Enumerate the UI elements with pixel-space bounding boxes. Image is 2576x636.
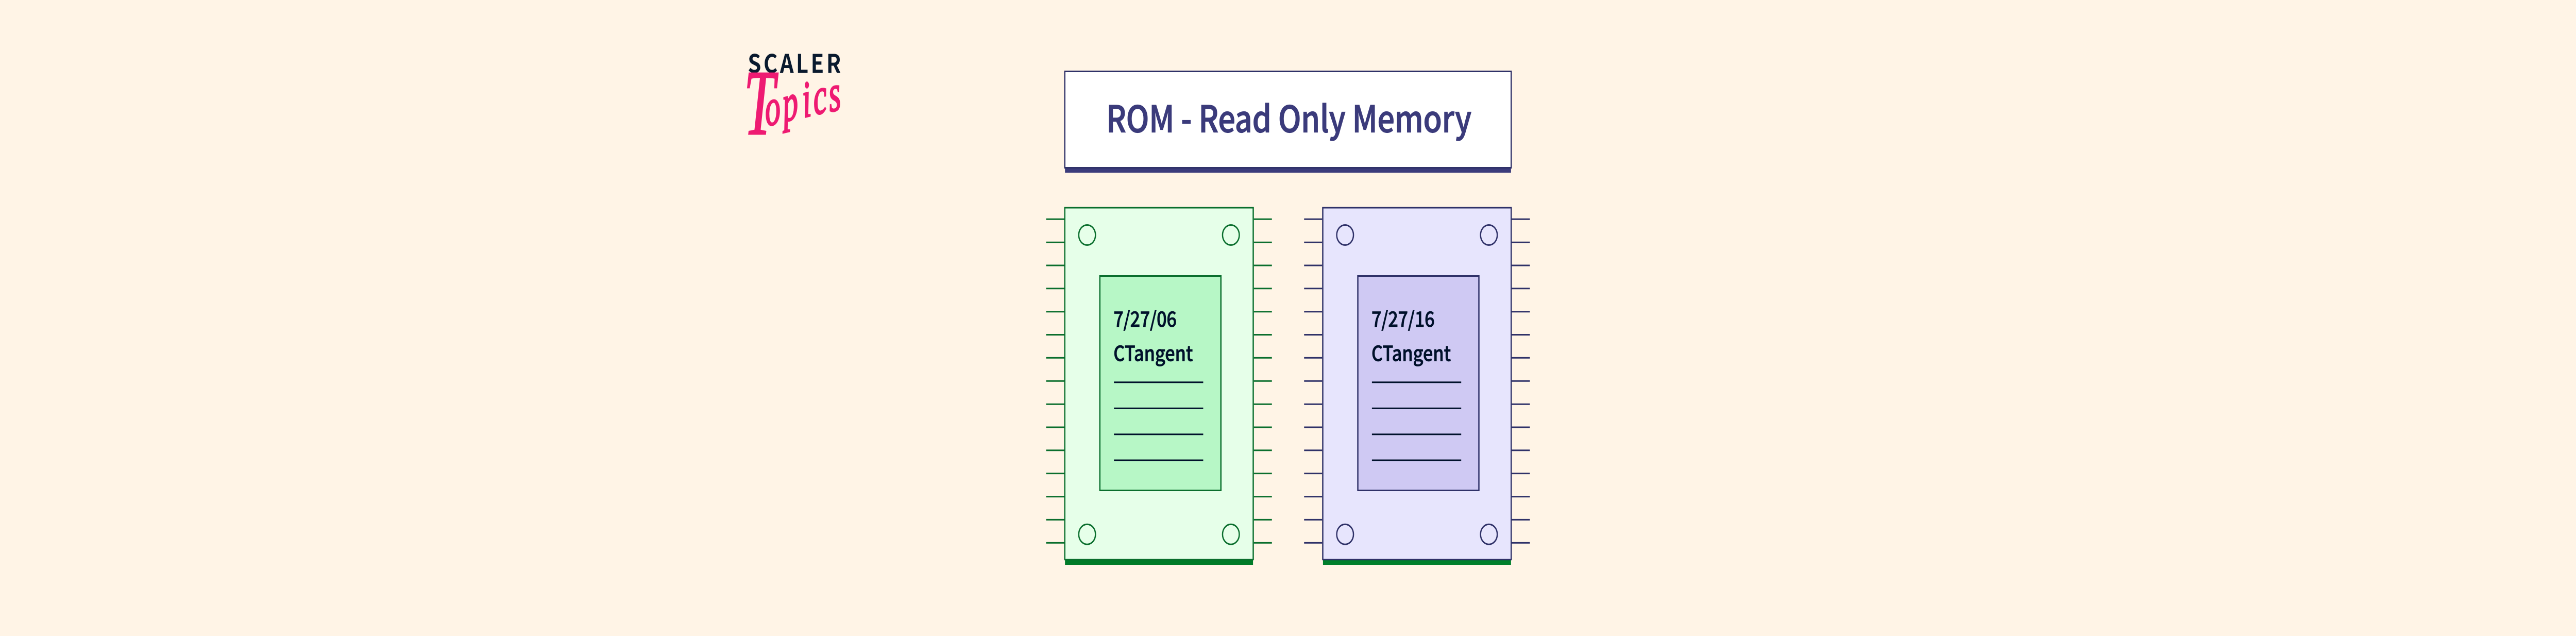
chip body xyxy=(1065,208,1253,560)
label panel xyxy=(1358,276,1479,491)
label date: 7/27/16 xyxy=(1371,302,1435,333)
chip label xyxy=(1100,276,1221,491)
logo script: Topics: T xyxy=(744,52,778,155)
chip pins xyxy=(1046,219,1272,543)
chip pins xyxy=(1304,219,1530,543)
title frame xyxy=(1065,71,1511,168)
title underline bar xyxy=(1065,168,1511,173)
title text: ROM - Read Only Memory xyxy=(1106,90,1471,143)
label panel xyxy=(1100,276,1221,491)
chip base bar xyxy=(1323,559,1511,565)
label ruled lines xyxy=(1114,382,1203,460)
chip: green ROM chip dated 7/27/06 xyxy=(1046,208,1272,565)
label ruled lines xyxy=(1372,382,1461,460)
title box xyxy=(1065,71,1511,173)
label name: CTangent xyxy=(1371,337,1451,367)
logo wordmark: SCALER: SCALER xyxy=(748,44,841,81)
chip: purple ROM chip dated 7/27/16 xyxy=(1304,208,1530,565)
label date: 7/27/06 xyxy=(1113,302,1177,333)
chip base bar xyxy=(1065,559,1253,565)
logo: Scaler Topics xyxy=(744,44,843,155)
chip mounting holes xyxy=(1337,225,1497,544)
chip label xyxy=(1358,276,1479,491)
logo script: Topics: opics xyxy=(762,64,843,138)
label name: CTangent xyxy=(1113,337,1193,367)
chip body xyxy=(1323,208,1511,560)
chip mounting holes xyxy=(1079,225,1239,544)
